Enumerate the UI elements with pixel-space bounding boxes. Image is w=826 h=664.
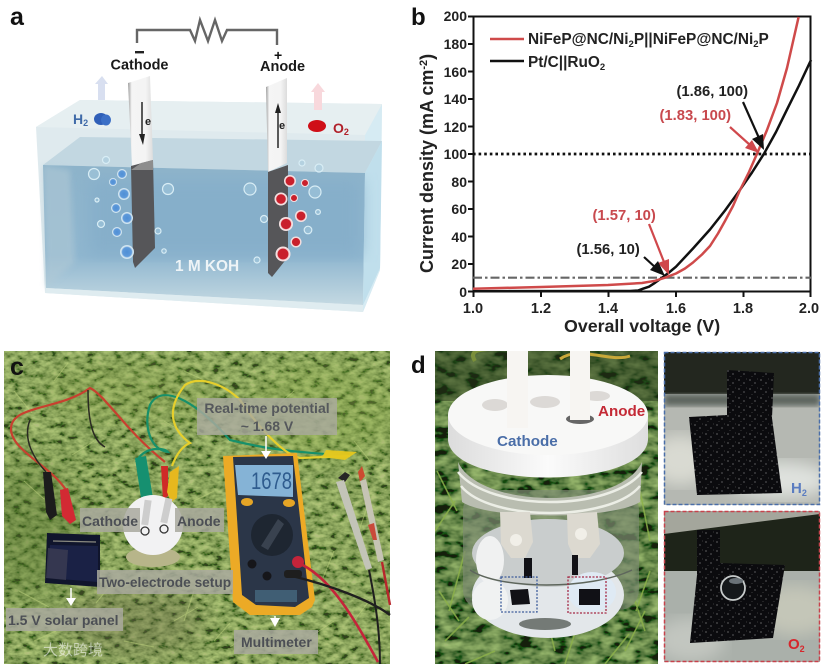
y axis tick labels: 140 <box>444 91 467 107</box>
legend label red: P <box>759 31 769 48</box>
two-electrode cell <box>123 495 183 567</box>
axis ticks <box>468 16 810 297</box>
label: two-electrode setup: Two-electrode setup <box>99 575 231 590</box>
label: cathode: Cathode <box>82 513 138 529</box>
white PTFE rods <box>507 351 590 428</box>
circuit with resistor <box>137 20 277 45</box>
label: real-time potential: ~ 1.68 V <box>241 418 294 434</box>
legend swatch red <box>490 38 524 40</box>
annotation (1.57, 10): (1.57, 10) <box>592 208 656 224</box>
x axis tick labels: 1.8 <box>733 301 753 317</box>
arrow to 1.86 <box>743 102 764 150</box>
inset: hydrogen electrode <box>650 352 826 505</box>
label: solar panel: 1.5 V solar panel <box>8 612 118 628</box>
red and black wires to solar panel <box>11 388 165 490</box>
red dotted box <box>568 577 606 613</box>
O2 label: 2 <box>800 644 805 654</box>
Cathode label: Cathode <box>110 58 168 74</box>
inset: oxygen electrode <box>655 511 826 662</box>
watermark: 大数跨境 <box>43 641 103 659</box>
y axis title: -2 <box>418 60 430 70</box>
H2 gas arrow <box>95 76 108 100</box>
y axis tick labels: 100 <box>444 146 467 162</box>
1 M KOH label: 1 M KOH <box>175 258 239 275</box>
solar panel <box>45 533 100 587</box>
y axis tick labels: 200 <box>444 8 467 24</box>
label: real-time potential: Real-time potential <box>204 400 330 416</box>
y axis tick labels: 20 <box>451 256 467 272</box>
multimeter sockets <box>248 560 272 580</box>
multimeter screen <box>235 465 293 497</box>
multimeter <box>223 453 315 615</box>
legend label red: 2 <box>753 39 759 50</box>
arrow to 1.83 <box>730 127 759 153</box>
panel d: jar photo and inset images <box>411 347 826 664</box>
100 mA reference line <box>473 153 811 155</box>
H2 label: H <box>791 480 802 497</box>
x axis tick labels: 1.2 <box>531 301 551 317</box>
y axis tick labels: 180 <box>444 36 467 52</box>
Cathode label: Cathode <box>497 433 558 450</box>
arrow under multimeter <box>270 616 280 627</box>
x axis title: Overall voltage (V) <box>564 316 720 336</box>
hydrogen bubbles <box>109 169 134 259</box>
x axis tick labels: 1.6 <box>666 301 686 317</box>
red dashed border <box>664 512 820 662</box>
O2 label: O <box>788 636 800 653</box>
x axis tick labels: 1.0 <box>463 301 483 317</box>
panel c: outdoor solar demonstration photo <box>0 351 404 664</box>
multimeter screen: 1678 <box>251 468 292 495</box>
O2 gas arrow <box>311 83 325 110</box>
H2 label: H <box>73 111 83 127</box>
H2 label: 2 <box>83 118 88 128</box>
annotation (1.56, 10): (1.56, 10) <box>576 242 640 258</box>
anode sample in jar <box>572 555 600 605</box>
x axis tick labels: 2.0 <box>799 301 819 317</box>
y axis tick labels: 160 <box>444 64 467 80</box>
arrow to 1.57 <box>649 224 669 275</box>
arrow under solar panel <box>66 588 76 606</box>
cathode electrode: e <box>145 116 151 128</box>
Anode label: Anode <box>598 403 645 420</box>
y axis tick labels: 120 <box>444 119 467 135</box>
jar threads <box>458 462 642 516</box>
y axis title: ) <box>417 54 437 60</box>
panel letter b: b <box>411 4 426 31</box>
anode electrode: e <box>279 120 285 132</box>
white lid <box>448 375 648 478</box>
y axis tick labels: 0 <box>459 284 467 300</box>
cathode sample in jar <box>510 558 532 605</box>
label: real-time potential <box>197 398 337 435</box>
legend label red: NiFeP@NC/Ni <box>528 31 629 48</box>
Anode label: Anode <box>260 59 305 75</box>
panel letter c: c <box>10 353 24 381</box>
y axis tick labels: 60 <box>451 201 467 217</box>
legend <box>490 31 769 73</box>
x axis tick labels <box>463 301 819 317</box>
O2 label: 2 <box>344 127 349 137</box>
test leads plugged in <box>284 556 390 662</box>
electrode clamps <box>500 512 600 558</box>
panel b: polarization curve chart <box>411 4 819 336</box>
grass background <box>4 351 390 664</box>
plus sign: + <box>274 47 282 63</box>
panel letter d: d <box>411 352 426 379</box>
grey probes <box>336 479 390 664</box>
label: anode <box>175 508 224 532</box>
blue dashed border <box>664 352 820 504</box>
curve: Pt/C black <box>473 60 811 291</box>
glass tank <box>36 100 382 312</box>
annotation (1.83, 100): (1.83, 100) <box>660 108 731 124</box>
cathode electrode <box>128 76 155 268</box>
label: multimeter: Multimeter <box>241 634 312 650</box>
arrow to 1.56 <box>644 257 665 276</box>
label: multimeter <box>234 630 318 654</box>
blue dotted box <box>501 577 537 612</box>
O2 molecule <box>308 120 326 132</box>
plot frame <box>474 16 810 292</box>
y axis title: Current density (mA cm <box>417 70 437 273</box>
10 mA reference line <box>473 277 811 279</box>
alligator clips on wires <box>43 450 365 524</box>
legend swatch black <box>490 60 524 62</box>
H2 molecule <box>94 113 111 126</box>
anode electrode <box>266 78 288 277</box>
glass jar <box>463 490 639 638</box>
label: solar panel <box>6 608 123 631</box>
minus sign <box>135 51 144 53</box>
x axis tick labels: 1.4 <box>598 301 618 317</box>
legend label red: P||NiFeP@NC/Ni <box>634 31 753 48</box>
arrow to screen <box>261 436 271 459</box>
electrolyte water <box>43 141 382 312</box>
panel letter a: a <box>10 3 25 31</box>
y axis tick labels: 80 <box>451 174 467 190</box>
legend label black: 2 <box>600 62 605 73</box>
curve: NiFeP red <box>473 17 799 289</box>
H2 label: 2 <box>802 488 807 498</box>
label: cathode <box>80 508 140 532</box>
oxygen bubbles <box>274 175 309 262</box>
y axis tick labels <box>444 8 467 300</box>
clear bubbles <box>88 156 323 263</box>
label: two-electrode setup <box>97 570 233 594</box>
annotation (1.86, 100): (1.86, 100) <box>676 84 748 100</box>
green and yellow wires <box>136 381 350 466</box>
O2 label: O <box>333 120 344 136</box>
multimeter dial <box>251 514 293 556</box>
multimeter buttons <box>241 498 295 507</box>
panel a: electrolyser schematic <box>10 3 382 312</box>
y axis tick labels: 40 <box>451 229 467 245</box>
grass background with jar <box>435 351 658 664</box>
label: anode: Anode <box>177 513 221 529</box>
legend label red: 2 <box>629 39 634 50</box>
legend label black: Pt/C||RuO <box>528 54 600 71</box>
